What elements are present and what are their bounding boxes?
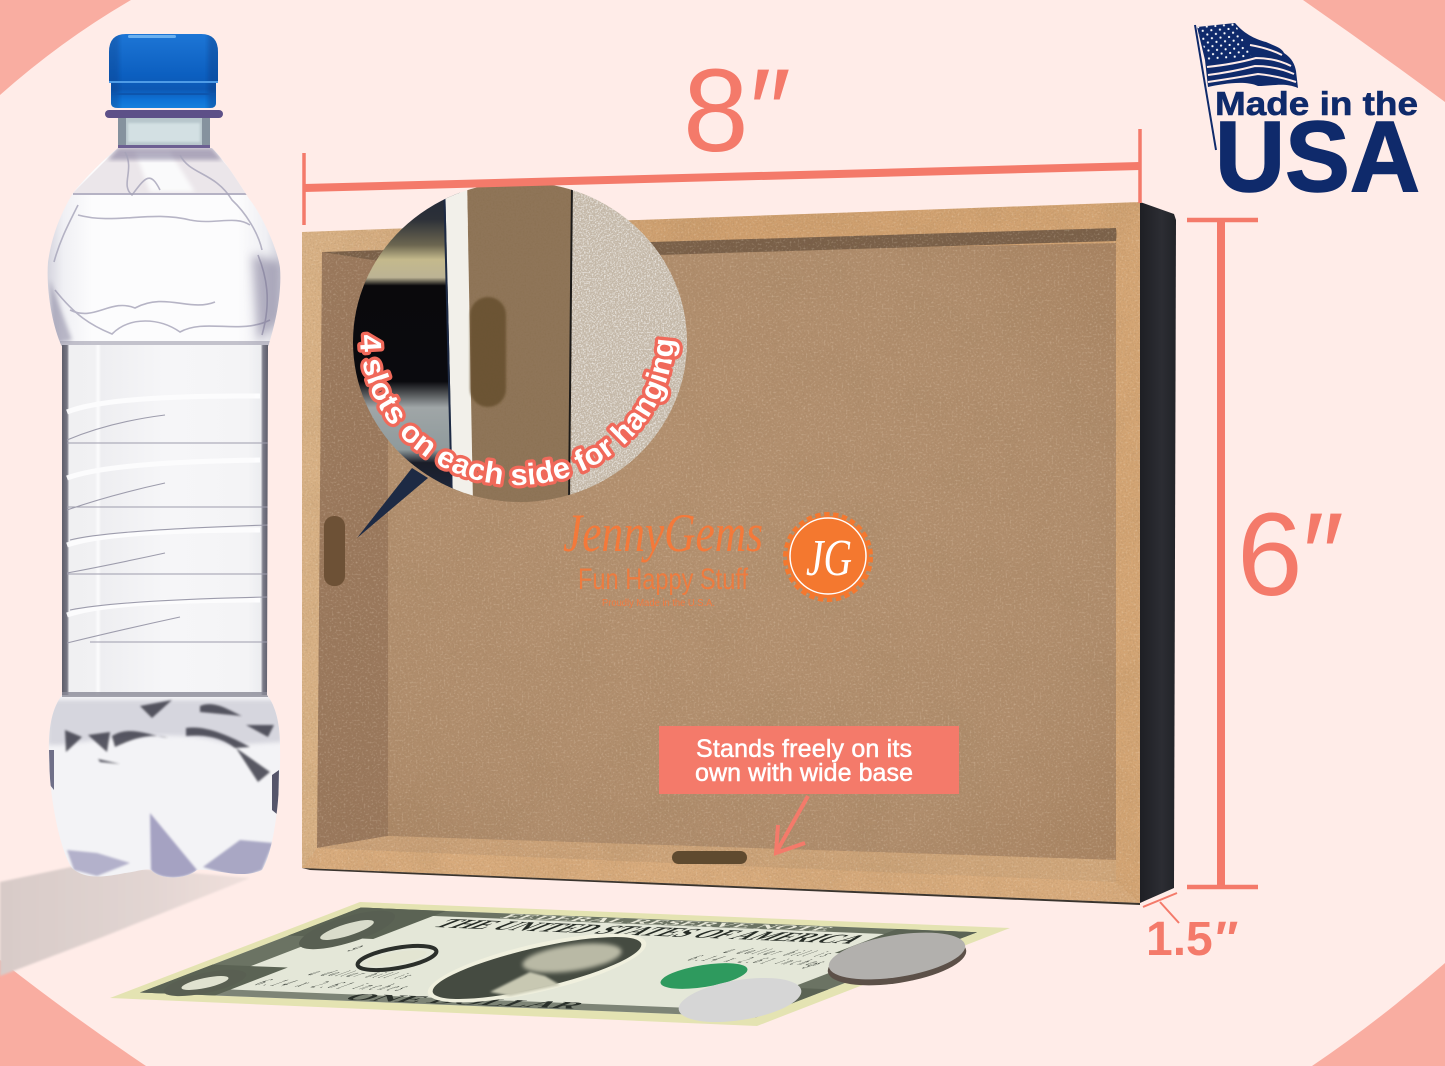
- bill printing: 9: [341, 944, 369, 953]
- bill printing: a dollar bill is: [302, 968, 421, 981]
- badge line 2: USA: [1215, 101, 1420, 213]
- bill portrait: [422, 919, 652, 1017]
- shoulder ripples: [54, 152, 270, 335]
- air section of shoulder: [73, 148, 250, 193]
- bill printing: 6.14 x 2.61 inches: [681, 953, 834, 967]
- dollar bill: [110, 902, 1010, 1029]
- Made in the USA badge: [1195, 23, 1420, 213]
- bill printing: a dollar bill is: [717, 946, 841, 959]
- callout text: own with wide base: [695, 759, 913, 787]
- flag: [1195, 23, 1298, 150]
- magnifier lens: [350, 180, 690, 505]
- bill printing: 6.14 x 2.61 inches: [247, 977, 417, 993]
- tagline: Fun Happy Stuff: [578, 563, 749, 596]
- ribs: [67, 396, 260, 615]
- height end caps: [1187, 220, 1258, 887]
- width line: [304, 166, 1140, 188]
- base feet shadows: [150, 813, 197, 878]
- depth dimension: [1143, 893, 1238, 966]
- lower rim: [302, 848, 1140, 903]
- dime: [676, 971, 804, 1029]
- callout: stands freely: [659, 726, 959, 853]
- width dimension: [304, 45, 1140, 225]
- back wall: [385, 243, 1116, 860]
- bottle base: [44, 692, 286, 885]
- bottom slot: [672, 851, 747, 864]
- bottle body: [44, 145, 286, 885]
- callout box: [659, 726, 959, 794]
- bill seal: [356, 941, 438, 975]
- bill green seal: [659, 958, 749, 994]
- magnifier pointer: [357, 468, 428, 538]
- floor: [317, 836, 1116, 882]
- shadow box: [300, 200, 1176, 906]
- bill printing: 9: [796, 961, 824, 970]
- callout arrow: [776, 796, 808, 853]
- depth label: 1.5″: [1146, 913, 1238, 966]
- height dimension: [1187, 220, 1343, 888]
- logo seal: [787, 516, 869, 598]
- curved caption: 4 slots on each side for hanging: [357, 332, 683, 488]
- bottle cap: [109, 34, 218, 108]
- height line: [1217, 220, 1225, 888]
- label panel: [62, 345, 268, 695]
- width label: 8″: [683, 45, 790, 177]
- height label: 6″: [1237, 489, 1343, 621]
- magnifier: hanging slot close-up: [353, 185, 687, 538]
- depth tick lines: [1143, 893, 1179, 923]
- brand logo: [563, 503, 869, 609]
- corner shape: bottom right: [1312, 963, 1445, 1066]
- front rim: [302, 202, 1140, 903]
- quarter: [824, 924, 970, 994]
- water bottle: [44, 30, 286, 885]
- board underside line: [302, 868, 1140, 905]
- bill text: FEDERAL RESERVE NOTE: [496, 913, 839, 933]
- left slot: [324, 516, 345, 586]
- bottle neck: [105, 110, 223, 149]
- bill paper: [110, 902, 1010, 1026]
- brand name: JennyGems: [563, 503, 763, 563]
- corner shape: top right: [1303, 0, 1445, 102]
- width end ticks: [304, 129, 1140, 225]
- black side panel: [1140, 202, 1176, 903]
- top inner shadow: [322, 228, 1116, 262]
- bill printing: ONE DOLLAR: [335, 992, 593, 1011]
- bill printing: [136, 907, 979, 1019]
- small print: Proudly Made in the U.S.A.: [602, 598, 715, 609]
- badge line 1: Made in the: [1215, 85, 1418, 122]
- corner shape: top left: [0, 0, 131, 95]
- bill printing: THE UNITED STATES OF AMERICA: [424, 917, 875, 947]
- corner shape: bottom left: [0, 960, 146, 1066]
- logo seal: JG: [806, 530, 852, 587]
- left inner wall: [317, 252, 388, 848]
- wood grain overlay: [300, 200, 1142, 906]
- callout text: Stands freely on its: [696, 735, 912, 763]
- bottle shadow: [0, 864, 250, 976]
- slot in close-up: [470, 297, 506, 407]
- bill corner ornaments: [162, 903, 399, 1002]
